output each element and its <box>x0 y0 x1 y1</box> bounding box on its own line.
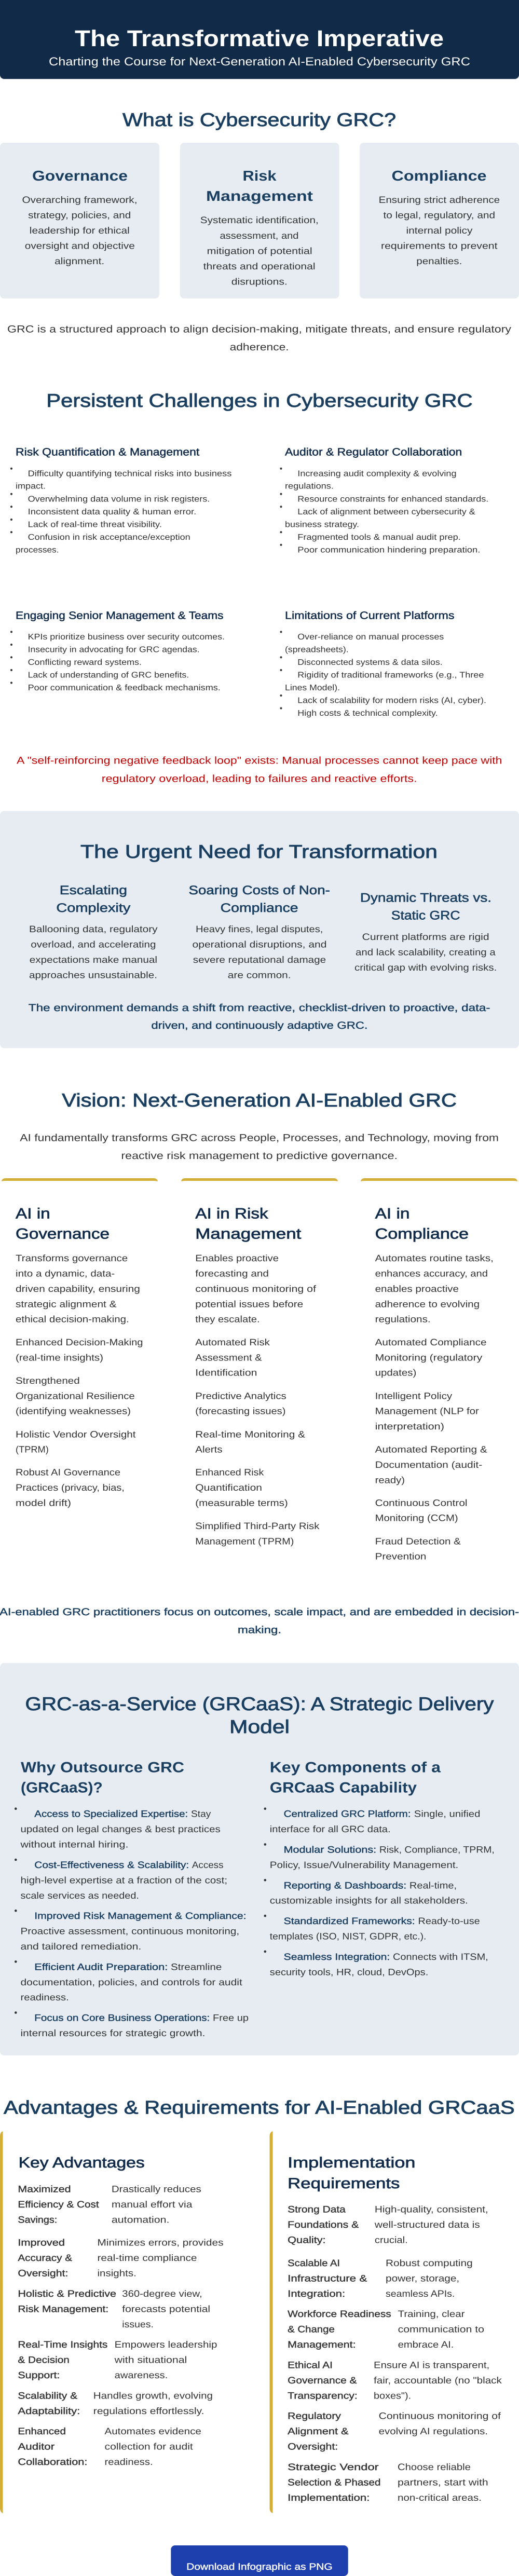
panel: Limitations of Current Platforms: Over-reliance on manual processes <box>297 633 444 642</box>
panel: Risk Management card: Risk <box>243 168 277 184</box>
column: Why Outsource GRC: Access to Specialized Expertise: <box>34 1809 188 1819</box>
column: Why Outsource GRC: Improved Risk Management & Compliance: <box>34 1911 247 1921</box>
panel: Key Advantages: Handles growth, evolving <box>93 2390 213 2401</box>
column: Soaring Costs of Non-Compliance: operational disruptions, and <box>192 939 327 950</box>
panel: Auditor & Regulator Collaboration: business strategy. <box>285 520 359 529</box>
panel: AI in Compliance <box>361 1178 517 1562</box>
panel: AI in Governance: Holistic Vendor Oversight <box>16 1429 136 1439</box>
panel: Implementation Requirements: partners, start with <box>398 2477 488 2487</box>
panel: Compliance card: Ensuring strict adherence <box>379 195 500 205</box>
panel: Implementation Requirements: Infrastructure & <box>288 2273 367 2283</box>
text block: GRC definition: GRC is a structured approach to align decision-making, mitigate threats, and ensure regulatory <box>7 324 511 335</box>
panel: Auditor & Regulator Collaboration: Lack of alignment between cybersecurity & <box>297 508 475 516</box>
panel: Key Advantages: real-time compliance <box>98 2253 197 2263</box>
column: Soaring Costs of Non-Compliance: are common. <box>228 970 291 980</box>
panel: AI in Compliance: Automated Compliance <box>375 1337 487 1347</box>
panel: AI in Risk Management: Enhanced Risk <box>195 1467 264 1478</box>
panel: Key Advantages: Oversight: <box>18 2268 68 2279</box>
panel: AI in Governance: AI in <box>16 1206 50 1222</box>
panel: Key Advantages: Automates evidence <box>105 2426 201 2436</box>
column: Key Components: Connects with ITSM, <box>393 1952 488 1962</box>
panel: Limitations of Current Platforms: Disconnected systems & data silos. <box>297 658 443 667</box>
panel: AI in Compliance: regulations. <box>375 1314 431 1325</box>
column: Key Components: Policy, Issue/Vulnerability Management. <box>270 1860 458 1870</box>
panel: AI in Risk Management: forecasting and <box>195 1268 269 1278</box>
panel: Implementation Requirements: Implementation <box>288 2155 415 2171</box>
panel: Limitations of Current Platforms: (spreadsheets). <box>285 646 349 654</box>
panel: AI in Governance: strategic alignment & <box>16 1299 117 1309</box>
column: Why Outsource GRC: internal resources for strategic growth. <box>21 2028 205 2038</box>
column: Escalating Complexity <box>29 883 158 980</box>
panel: Engaging Senior Management & Teams: Poor communication & feedback mechanisms. <box>28 684 221 692</box>
panel: Risk Quantification & Management <box>10 446 231 554</box>
panel: Governance card: alignment. <box>54 256 104 266</box>
panel: Risk Quantification & Management: Confusion in risk acceptance/exception <box>28 533 190 542</box>
column: Dynamic Threats vs. Static GRC: and lack scalability, creating a <box>356 947 496 957</box>
panel: Governance card: leadership for ethical <box>30 225 130 236</box>
panel: Limitations of Current Platforms <box>280 609 486 718</box>
panel: AI in Compliance: interpretation) <box>375 1421 444 1432</box>
panel: Risk Quantification & Management: Inconsistent data quality & human error. <box>28 508 196 516</box>
panel: Key Advantages: & Decision <box>18 2354 70 2365</box>
column: Key Components: Modular Solutions: <box>284 1845 376 1855</box>
panel: Risk Quantification & Management: Difficulty quantifying technical risks into business <box>28 469 231 478</box>
column: Why Outsource GRC: documentation, policies, and controls for audit <box>21 1977 242 1987</box>
column: Escalating Complexity: overload, and accelerating <box>31 939 156 950</box>
column: Why Outsource GRC: Cost-Effectiveness & Scalability: <box>34 1860 189 1870</box>
column: Key Components: Reporting & Dashboards: <box>284 1880 406 1890</box>
panel: Auditor & Regulator Collaboration: Resource constraints for enhanced standards. <box>297 495 488 503</box>
panel: Key Advantages: automation. <box>112 2214 169 2225</box>
panel: Implementation Requirements: fair, accountable (no "black <box>374 2375 502 2386</box>
panel: Key Advantages: Adaptability: <box>18 2406 80 2416</box>
panel: Implementation Requirements: Selection & Phased <box>288 2477 380 2487</box>
panel: Key Advantages: Key Advantages <box>19 2155 145 2171</box>
panel: AI in Governance <box>2 1178 158 1508</box>
column: Why Outsource GRC: (GRCaaS)? <box>21 1779 103 1796</box>
panel: AI in Risk Management: Real-time Monitoring & <box>195 1429 305 1439</box>
panel: Auditor & Regulator Collaboration: Fragmented tools & manual audit prep. <box>297 533 461 542</box>
panel: Limitations of Current Platforms: Rigidity of traditional frameworks (e.g., Three <box>297 671 484 680</box>
panel: Key Advantages: awareness. <box>115 2370 168 2380</box>
panel: AI in Compliance: Monitoring (CCM) <box>375 1513 458 1523</box>
panel: AI in Risk Management: Enables proactive <box>195 1253 279 1263</box>
panel: Key Advantages: Risk Management: <box>18 2304 108 2314</box>
panel: Key Advantages: Scalability & <box>18 2390 77 2401</box>
panel: Implementation Requirements: Continuous monitoring of <box>379 2411 501 2421</box>
panel: AI in Risk Management: AI in Risk <box>195 1206 268 1222</box>
column: Soaring Costs of Non-Compliance: severe reputational damage <box>193 955 326 965</box>
column: Escalating Complexity: Escalating <box>60 883 127 897</box>
column: Key Components: Ready-to-use <box>418 1916 480 1926</box>
panel: Key Advantages: 360-degree view, <box>122 2288 202 2299</box>
panel: Key Advantages: Auditor <box>18 2442 54 2452</box>
panel: Implementation Requirements: Ensure AI is transparent, <box>374 2360 489 2370</box>
panel: Implementation Requirements: Requirements <box>288 2175 400 2192</box>
panel: Risk Quantification & Management: Risk Quantification & Management <box>16 446 200 458</box>
panel: AI in Governance: (real-time insights) <box>16 1352 103 1362</box>
panel: AI in Risk Management: Automated Risk <box>195 1337 270 1347</box>
panel: AI in Risk Management: Management (TPRM) <box>195 1536 294 1546</box>
panel: Engaging Senior Management & Teams: Insecurity in advocating for GRC agendas. <box>28 646 200 654</box>
panel: Key Advantages: Real-Time Insights <box>18 2339 107 2350</box>
column: Soaring Costs of Non-Compliance: Compliance <box>221 901 298 915</box>
panel: Auditor & Regulator Collaboration: Poor communication hindering preparation. <box>297 546 480 554</box>
subtitle: Charting the Course for Next-Generation AI-Enabled Cybersecurity GRC <box>49 55 470 68</box>
panel: Key Advantages: Enhanced <box>18 2426 66 2436</box>
panel: Implementation Requirements: crucial. <box>375 2235 408 2245</box>
panel: Key Advantages: with situational <box>114 2354 187 2365</box>
column: Key Components: security tools, HR, cloud, DevOps. <box>270 1967 428 1977</box>
panel: Limitations of Current Platforms: High costs & technical complexity. <box>297 709 438 718</box>
callout: feedback loop warning: regulatory overload, leading to failures and reactive efforts. <box>102 773 417 784</box>
column: Soaring Costs of Non-Compliance <box>189 883 330 980</box>
panel: AI in Governance: model drift) <box>16 1497 71 1508</box>
button: Download Infographic as PNG: Download Infographic as PNG <box>186 2561 333 2572</box>
panel: Key Advantages: Holistic & Predictive <box>18 2288 116 2299</box>
callout: shift statement <box>29 1002 490 1031</box>
panel: AI in Governance: ethical decision-making. <box>16 1314 129 1325</box>
panel: Implementation Requirements: communication to <box>398 2324 484 2335</box>
column: Key Components: GRCaaS Capability <box>270 1779 417 1796</box>
panel: Risk Management card: threats and operational <box>203 261 316 271</box>
column: Why Outsource GRC: Proactive assessment, continuous monitoring, <box>21 1926 239 1937</box>
panel: AI in Compliance: Management (NLP for <box>375 1406 479 1416</box>
panel: Risk Management card: Management <box>206 188 313 204</box>
panel: Compliance card: to legal, regulatory, and <box>383 210 495 220</box>
column: Why Outsource GRC: high-level expertise at a fraction of the cost; <box>21 1875 227 1885</box>
panel: Implementation Requirements: seamless APIs. <box>386 2288 455 2299</box>
callout: shift statement: driven, and continuously adaptive GRC. <box>152 1020 367 1031</box>
heading: urgent need: The Urgent Need for Transformation <box>80 841 438 862</box>
panel: Key Advantages: manual effort via <box>112 2199 193 2210</box>
panel: Implementation Requirements: Scalable AI <box>288 2258 340 2268</box>
panel: Risk Management card: disruptions. <box>231 276 288 287</box>
panel: Implementation Requirements <box>270 2131 502 2513</box>
column: Escalating Complexity: Complexity <box>56 901 130 915</box>
heading: Vision: Vision: Next-Generation AI-Enabled GRC <box>62 1089 457 1111</box>
column: Why Outsource GRC: Focus on Core Business Operations: <box>34 2013 210 2023</box>
panel: Key Advantages: Maximized <box>18 2184 71 2194</box>
button: Download Infographic as PNG <box>171 2545 348 2576</box>
panel: AI in Compliance: Documentation (audit- <box>375 1460 482 1470</box>
panel: AI in Risk Management: they escalate. <box>195 1314 260 1325</box>
panel: Key Advantages: issues. <box>122 2319 154 2329</box>
panel: Governance card: strategy, policies, and <box>28 210 131 220</box>
title: The Transformative Imperative <box>75 26 444 51</box>
panel: Risk Management card: assessment, and <box>220 230 299 241</box>
column: Why Outsource GRC: Access <box>192 1860 223 1870</box>
panel: Engaging Senior Management & Teams <box>10 609 225 692</box>
panel: Implementation Requirements: Foundations & <box>288 2219 359 2230</box>
panel: Auditor & Regulator Collaboration: regulations. <box>285 482 334 491</box>
panel: AI in Compliance: Continuous Control <box>375 1497 467 1508</box>
text block: vision intro: AI fundamentally transforms GRC across People, Processes, and Technology, moving from <box>20 1133 499 1144</box>
panel: Compliance card: requirements to prevent <box>381 241 497 251</box>
panel: Key Advantages: Collaboration: <box>18 2457 87 2467</box>
panel: The Urgent Need for Transformation <box>0 811 519 1048</box>
panel: Implementation Requirements: Oversight: <box>288 2442 338 2452</box>
panel: Key Advantages: Minimizes errors, provides <box>98 2237 223 2247</box>
panel: AI in Governance: Governance <box>16 1226 110 1243</box>
column: Key Components: templates (ISO, NIST, GDPR, etc.). <box>270 1931 426 1941</box>
panel: Implementation Requirements: Ethical AI <box>288 2360 333 2370</box>
panel: AI in Governance: Enhanced Decision-Making <box>16 1337 143 1347</box>
heading: GRCaaS: GRC-as-a-Service (GRCaaS): A Strategic Delivery <box>25 1693 494 1714</box>
panel: Governance card: Overarching framework, <box>22 195 137 205</box>
panel: Implementation Requirements: Transparency: <box>288 2390 358 2401</box>
panel: Limitations of Current Platforms: Lack of scalability for modern risks (AI, cyber). <box>297 697 486 705</box>
column: Key Components: Single, unified <box>414 1809 480 1819</box>
panel: AI in Governance: (identifying weaknesses) <box>16 1406 131 1416</box>
panel: AI in Compliance: adherence to evolving <box>375 1299 480 1309</box>
panel: Implementation Requirements: High-quality, consistent, <box>375 2204 488 2215</box>
panel: Risk Quantification & Management: Overwhelming data volume in risk registers. <box>28 495 210 503</box>
panel: Implementation Requirements: power, storage, <box>386 2273 459 2283</box>
column: Why Outsource GRC: Stay <box>191 1809 211 1819</box>
panel: Implementation Requirements: Training, clear <box>398 2309 465 2319</box>
column: Key Components: Real-time, <box>409 1880 457 1890</box>
column: Key Components: Key Components of a <box>270 1759 441 1776</box>
panel: AI in Governance: into a dynamic, data- <box>16 1268 115 1278</box>
panel: Auditor & Regulator Collaboration: Auditor & Regulator Collaboration <box>285 446 462 458</box>
panel: Implementation Requirements: Management: <box>288 2339 356 2350</box>
column: Why Outsource GRC <box>15 1759 249 2038</box>
heading: GRCaaS: Model <box>229 1716 290 1737</box>
heading: What is Cybersecurity GRC?: What is Cybersecurity GRC? <box>122 109 396 130</box>
panel: Implementation Requirements: & Change <box>288 2324 335 2335</box>
panel: AI in Risk Management: Simplified Third-Party Risk <box>195 1521 320 1531</box>
panel: Compliance card: penalties. <box>416 256 462 266</box>
text block: vision intro <box>20 1133 499 1162</box>
panel: Key Advantages: collection for audit <box>105 2442 193 2452</box>
panel: Risk Management card: Systematic identification, <box>200 215 319 225</box>
panel: Risk Quantification & Management: impact. <box>16 482 46 491</box>
panel: Governance card: Governance <box>32 168 128 184</box>
panel: AI in Compliance: Compliance <box>375 1226 469 1243</box>
callout: feedback loop warning: A "self-reinforcing negative feedback loop" exists: Manual processes cannot keep pace with <box>17 755 502 766</box>
panel: Implementation Requirements: Implementation: <box>288 2492 370 2503</box>
panel: AI in Risk Management: (forecasting issues) <box>195 1406 285 1416</box>
panel: Implementation Requirements: Regulatory <box>288 2411 341 2421</box>
column: Dynamic Threats vs. Static GRC: Static GRC <box>391 909 460 923</box>
heading: Persistent Challenges: Persistent Challenges in Cybersecurity GRC <box>46 390 473 411</box>
panel: AI in Risk Management <box>181 1178 338 1546</box>
column: Escalating Complexity: Ballooning data, regulatory <box>29 924 158 934</box>
panel: Risk Quantification & Management: Lack of real-time threat visibility. <box>28 520 162 529</box>
column: Why Outsource GRC: and tailored remediation. <box>21 1941 141 1952</box>
panel: AI in Risk Management: Assessment & <box>195 1352 262 1362</box>
text block: GRC definition: adherence. <box>230 342 289 353</box>
column: Key Components: Seamless Integration: <box>284 1952 390 1962</box>
panel: AI in Risk Management: (measurable terms) <box>195 1497 288 1508</box>
column: Key Components: Centralized GRC Platform: <box>284 1809 411 1819</box>
panel: Auditor & Regulator Collaboration: Increasing audit complexity & evolving <box>297 469 457 478</box>
panel: header banner <box>0 0 519 79</box>
column: Soaring Costs of Non-Compliance: Soaring Costs of Non- <box>189 883 330 897</box>
panel: Implementation Requirements: non-critical areas. <box>398 2492 482 2503</box>
panel: Key Advantages: readiness. <box>105 2457 153 2467</box>
column: Why Outsource GRC: updated on legal changes & best practices <box>21 1824 221 1834</box>
panel: Key Advantages: Improved <box>18 2237 65 2247</box>
panel: Limitations of Current Platforms: Limitations of Current Platforms <box>285 609 455 621</box>
panel: AI in Risk Management: Predictive Analytics <box>195 1391 286 1401</box>
column: Why Outsource GRC: Why Outsource GRC <box>21 1759 184 1776</box>
panel: AI in Compliance: Automated Reporting & <box>375 1444 487 1455</box>
panel: AI in Risk Management: Quantification <box>195 1482 262 1493</box>
panel: Compliance card: internal policy <box>406 225 472 236</box>
text block: GRC definition <box>7 324 511 353</box>
panel: Key Advantages: Drastically reduces <box>112 2184 201 2194</box>
column: Why Outsource GRC: Streamline <box>171 1961 222 1972</box>
panel: Implementation Requirements: Integration: <box>288 2288 345 2299</box>
panel: Risk Management card <box>180 143 339 298</box>
panel: Key Advantages: Efficiency & Cost <box>18 2199 99 2210</box>
panel: Implementation Requirements: embrace AI. <box>398 2339 454 2350</box>
panel: Implementation Requirements: Workforce Readiness <box>288 2309 391 2319</box>
column: Why Outsource GRC: without internal hiring. <box>20 1839 128 1850</box>
panel: Key Advantages: regulations effortlessly. <box>93 2406 204 2416</box>
panel: AI in Governance: Strengthened <box>16 1375 80 1386</box>
panel: AI in Governance: Transforms governance <box>16 1253 128 1263</box>
panel: AI in Risk Management: Alerts <box>195 1444 223 1455</box>
panel: AI in Compliance: enhances accuracy, and <box>375 1268 488 1278</box>
panel: Engaging Senior Management & Teams: KPIs prioritize business over security outcomes. <box>28 633 225 642</box>
panel: Key Advantages: Support: <box>18 2370 60 2380</box>
panel: Key Advantages: insights. <box>98 2268 136 2279</box>
panel: Engaging Senior Management & Teams: Conflicting reward systems. <box>28 658 142 667</box>
callout: practitioners statement <box>0 1606 519 1636</box>
panel: AI in Compliance: updates) <box>375 1368 416 1378</box>
panel: Governance card: oversight and objective <box>25 241 135 251</box>
panel: Compliance card <box>360 143 519 298</box>
column: Key Components: customizable insights for all stakeholders. <box>270 1896 468 1906</box>
panel: Implementation Requirements: well-structured data is <box>374 2219 480 2230</box>
panel: Implementation Requirements: Alignment & <box>288 2426 349 2436</box>
panel: AI in Compliance: Monitoring (regulatory <box>375 1352 482 1362</box>
panel: AI in Compliance: ready) <box>375 1475 405 1485</box>
callout: feedback loop warning <box>17 755 502 784</box>
panel: Engaging Senior Management & Teams: Engaging Senior Management & Teams <box>16 609 223 621</box>
column: Why Outsource GRC: scale services as needed. <box>21 1890 139 1901</box>
panel: Risk Management card: mitigation of potential <box>207 246 312 256</box>
panel: AI in Compliance: AI in <box>375 1206 410 1222</box>
column: Dynamic Threats vs. Static GRC: Current platforms are rigid <box>362 932 489 942</box>
panel: Implementation Requirements: Robust computing <box>386 2258 473 2268</box>
panel: Governance card <box>0 143 159 298</box>
panel: Key Advantages: Accuracy & <box>18 2253 72 2263</box>
panel: Compliance card: Compliance <box>391 168 487 184</box>
panel: AI in Risk Management: Management <box>195 1226 301 1243</box>
panel: Implementation Requirements: Choose reliable <box>398 2462 471 2472</box>
column: Why Outsource GRC: readiness. <box>21 1992 69 2002</box>
column: Why Outsource GRC: Free up <box>213 2013 249 2023</box>
panel: AI in Governance: (TPRM) <box>16 1444 49 1455</box>
panel: Key Advantages <box>0 2131 223 2513</box>
panel: Key Advantages: Empowers leadership <box>115 2339 217 2350</box>
callout: practitioners statement: making. <box>238 1625 281 1636</box>
panel: Risk Quantification & Management: processes. <box>16 546 59 554</box>
panel: AI in Risk Management: continuous monitoring of <box>195 1284 317 1294</box>
panel: AI in Risk Management: potential issues before <box>195 1299 303 1309</box>
panel: AI in Compliance: Automates routine tasks, <box>375 1253 494 1263</box>
heading: GRCaaS <box>25 1693 494 1737</box>
panel: Implementation Requirements: Quality: <box>288 2235 326 2245</box>
column: Dynamic Threats vs. Static GRC <box>354 891 497 973</box>
column: Key Components <box>264 1759 495 1977</box>
panel: AI in Governance: Practices (privacy, bias, <box>16 1482 125 1493</box>
panel: Limitations of Current Platforms: Lines Model). <box>285 684 340 692</box>
panel: Auditor & Regulator Collaboration <box>280 446 488 554</box>
column: Key Components: Standardized Frameworks: <box>284 1916 415 1926</box>
panel: Implementation Requirements: evolving AI regulations. <box>379 2426 488 2436</box>
panel: AI in Governance: Robust AI Governance <box>16 1467 120 1478</box>
panel: Key Advantages: Savings: <box>18 2214 57 2225</box>
panel: AI in Compliance: Intelligent Policy <box>375 1391 452 1401</box>
panel: Engaging Senior Management & Teams: Lack of understanding of GRC benefits. <box>28 671 189 680</box>
panel: AI in Compliance: enables proactive <box>375 1284 459 1294</box>
heading: Advantages & Requirements: Advantages & Requirements for AI-Enabled GRCaaS <box>4 2097 515 2118</box>
column: Key Components: Risk, Compliance, TPRM, <box>379 1845 495 1855</box>
column: Why Outsource GRC: Efficient Audit Preparation: <box>34 1961 168 1972</box>
panel: AI in Governance: Organizational Resilience <box>16 1391 135 1401</box>
column: Dynamic Threats vs. Static GRC: Dynamic Threats vs. <box>360 891 491 905</box>
panel: AI in Compliance: Fraud Detection & <box>375 1536 461 1546</box>
text block: vision intro: reactive risk management to predictive governance. <box>121 1150 398 1162</box>
column: Escalating Complexity: approaches unsustainable. <box>29 970 157 980</box>
panel: Key Advantages: forecasts potential <box>122 2304 210 2314</box>
panel: AI in Risk Management: Identification <box>195 1368 257 1378</box>
column: Key Components: interface for all GRC data. <box>270 1824 391 1834</box>
panel: Implementation Requirements: boxes"). <box>374 2390 411 2401</box>
panel: AI in Compliance: Prevention <box>375 1551 426 1562</box>
panel: AI in Governance: driven capability, ensuring <box>16 1284 140 1294</box>
column: Soaring Costs of Non-Compliance: Heavy fines, legal disputes, <box>196 924 323 934</box>
panel: Implementation Requirements: Strategic Vendor <box>288 2462 379 2472</box>
callout: shift statement: The environment demands a shift from reactive, checklist-driven to proactive, data- <box>29 1002 490 1014</box>
column: Dynamic Threats vs. Static GRC: critical gap with evolving risks. <box>354 962 497 973</box>
panel: GRC-as-a-Service <box>0 1663 519 2055</box>
panel: Implementation Requirements: Strong Data <box>288 2204 346 2215</box>
callout: practitioners statement: AI-enabled GRC practitioners focus on outcomes, scale impact, and are embedded in decision- <box>0 1606 519 1618</box>
column: Escalating Complexity: expectations make manual <box>30 955 157 965</box>
panel: Implementation Requirements: Governance & <box>288 2375 357 2386</box>
